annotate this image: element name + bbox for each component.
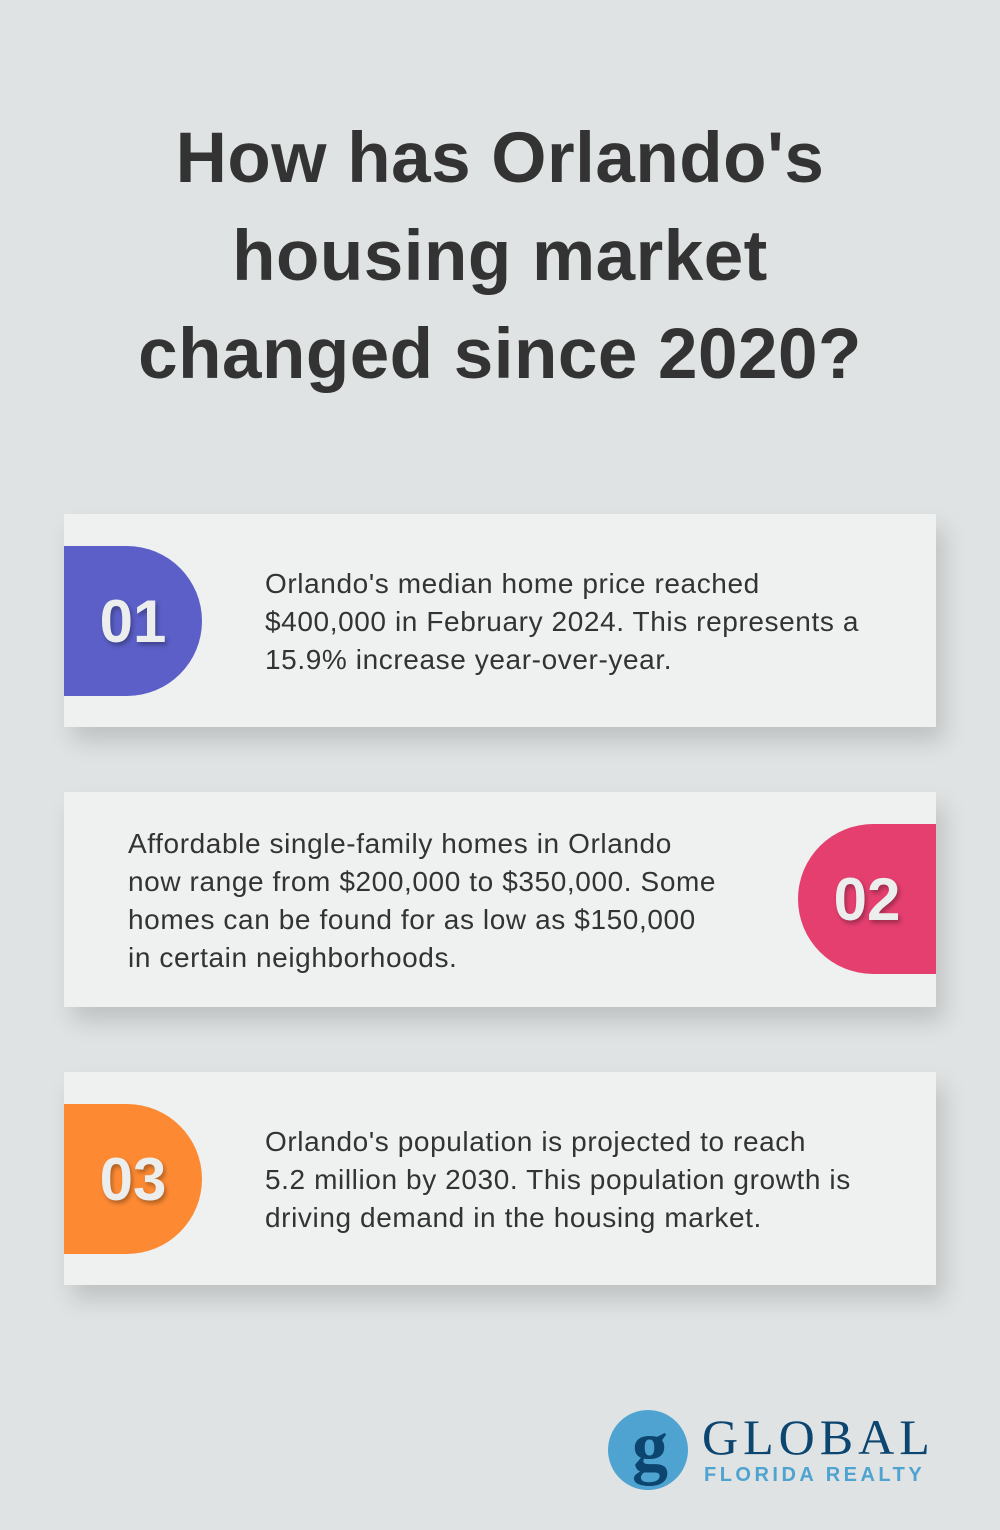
text 02: now range from $200,000 to $350,000. Some — [128, 866, 716, 897]
text 03: Orlando's population is projected to reach — [265, 1126, 806, 1157]
badge 03: 03 — [100, 1146, 166, 1212]
title: housing market — [232, 217, 768, 296]
badge 01 — [64, 546, 202, 696]
title — [138, 119, 862, 394]
icon: g circle — [608, 1408, 688, 1490]
panel: card 01 — [64, 514, 936, 727]
badge 03 — [64, 1104, 202, 1254]
logo text: GLOBAL — [702, 1409, 935, 1465]
text 02: Affordable single-family homes in Orlando — [128, 828, 672, 859]
text 01: 15.9% increase year-over-year. — [265, 644, 672, 675]
title: How has Orlando's — [176, 119, 824, 198]
text 03: 5.2 million by 2030. This population growth is — [265, 1164, 851, 1195]
icon: g circle: g — [632, 1408, 668, 1486]
text 02: in certain neighborhoods. — [128, 942, 457, 973]
title: changed since 2020? — [138, 315, 862, 394]
badge 01: 01 — [100, 588, 166, 654]
badge 02 — [798, 824, 936, 974]
text 02 — [128, 828, 716, 973]
text 01 — [265, 568, 859, 675]
badge 02: 02 — [834, 866, 900, 932]
panel: card 02 — [64, 792, 936, 1007]
text 01: $400,000 in February 2024. This represents a — [265, 606, 859, 637]
panel: card 03 — [64, 1072, 936, 1285]
text 03: driving demand in the housing market. — [265, 1202, 762, 1233]
text 02: homes can be found for as low as $150,000 — [128, 904, 696, 935]
logo — [608, 1408, 935, 1490]
text 01: Orlando's median home price reached — [265, 568, 760, 599]
text 03 — [265, 1126, 851, 1233]
logo: FLORIDA REALTY — [704, 1464, 925, 1486]
